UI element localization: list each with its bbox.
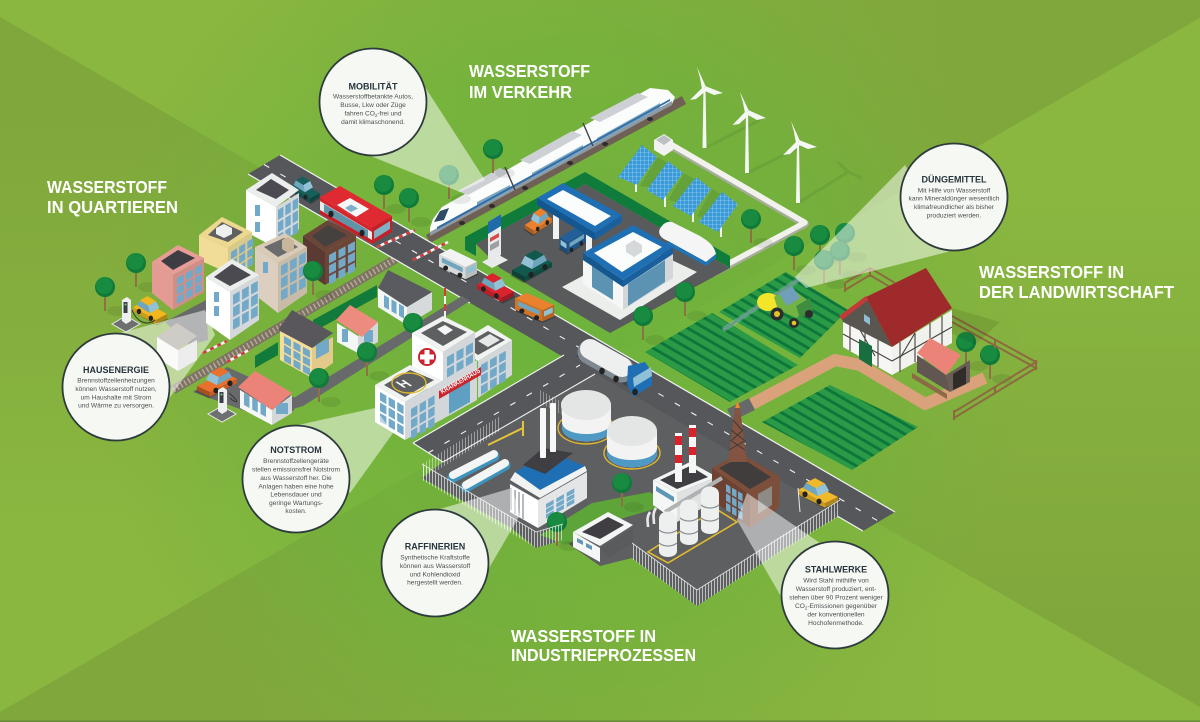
callout: Notstrom: stellen emissionsfrei Notstrom xyxy=(252,466,340,474)
gas station: hedge and pad xyxy=(465,172,730,333)
heading: Wasserstoff in Quartieren: WASSERSTOFF xyxy=(47,177,167,197)
solar panels xyxy=(618,145,738,237)
callout: Hausenergie: und Wärme zu versorgen. xyxy=(78,402,154,410)
callout: Notstrom: geringe Wartungs- xyxy=(269,500,323,507)
callout: Hausenergie: Brennstoffzellenheizungen xyxy=(77,378,155,384)
trees xyxy=(95,139,1012,384)
callout: Stahlwerke: 2 xyxy=(805,605,808,610)
trees at refinery xyxy=(547,473,644,551)
wind turbines xyxy=(690,67,862,203)
callout: Hausenergie: HAUSENERGIE xyxy=(83,365,149,375)
half-timbered farmhouse xyxy=(839,268,952,375)
callout: Raffinerien xyxy=(382,510,488,616)
fields xyxy=(645,272,918,470)
callout: Notstrom: Brennstoffzellengeräte xyxy=(263,458,329,465)
callout: Raffinerien: RAFFINERIEN xyxy=(405,542,465,552)
garage xyxy=(573,512,633,562)
helipad wing: H xyxy=(393,379,417,390)
gas cylinders xyxy=(453,454,505,487)
silos xyxy=(648,486,737,563)
callout: Notstrom: Anlagen haben eine hohe xyxy=(258,484,334,490)
callout: Raffinerien: und Kohlendioxid xyxy=(410,572,461,578)
taxi fence post xyxy=(798,488,800,512)
callout: Mobilität xyxy=(320,48,426,156)
illustrated isometric landscape xyxy=(95,67,1036,606)
factory ground xyxy=(413,355,840,606)
callout: Stahlwerke: Wasserstoff produziert, ent- xyxy=(796,586,876,593)
building: white front xyxy=(206,259,259,340)
heading: Wasserstoff in der Landwirtschaft xyxy=(979,262,1174,302)
callout: Düngemittel: produziert werden. xyxy=(927,212,981,220)
light beams from the callouts xyxy=(120,87,955,600)
storage tanks xyxy=(558,390,660,469)
callout: Stahlwerke xyxy=(782,542,888,648)
callout: Hausenergie xyxy=(62,334,170,440)
trees near houses xyxy=(309,313,435,407)
callout: Stahlwerke: Wird Stahl mithilfe von xyxy=(803,578,869,584)
heading: Wasserstoff in der Landwirtschaft: DER LANDWIRTSCHAFT xyxy=(979,282,1174,302)
heading: Wasserstoff in Quartieren xyxy=(47,177,178,217)
callout: Stahlwerke: -Emissionen gegenüber xyxy=(807,603,878,610)
callout: Mobilität: Busse, Lkw oder Züge xyxy=(340,102,406,109)
perimeter fence xyxy=(422,464,840,606)
railway track under the train xyxy=(173,100,684,390)
callout: Stahlwerke: stehen über 90 Prozent weniger xyxy=(789,594,884,602)
canopy xyxy=(537,183,622,257)
heading: Wasserstoff in Industrieprozessen xyxy=(511,626,696,665)
building: beige xyxy=(255,233,307,313)
heading: Wasserstoff in Industrieprozessen: WASSERSTOFF IN xyxy=(511,626,656,646)
steel works xyxy=(665,401,780,528)
hydrogen pipeline xyxy=(654,134,805,273)
farm path xyxy=(730,360,985,415)
industrial complex xyxy=(422,390,840,606)
callout: Stahlwerke: Hochofenmethode. xyxy=(808,620,864,627)
farm xyxy=(839,268,1036,420)
building: brown xyxy=(303,220,356,285)
tank and shop xyxy=(562,222,716,320)
charging station with yellow car xyxy=(112,296,169,332)
residential lanes xyxy=(165,296,470,420)
callout: Notstrom: Lebensdauer und xyxy=(270,492,322,498)
callout: Notstrom xyxy=(242,426,350,532)
heading: Wasserstoff in Industrieprozessen: INDUSTRIEPROZESSEN xyxy=(511,645,696,665)
callout: Raffinerien: hergestellt werden. xyxy=(407,580,463,586)
tower xyxy=(412,288,475,398)
house: yellow tall xyxy=(278,310,333,378)
heading: Wasserstoff im Verkehr: WASSERSTOFF xyxy=(469,61,590,81)
callout: Mobilität: 2 xyxy=(375,113,378,118)
building: yellow xyxy=(199,217,253,280)
right wing xyxy=(455,325,512,398)
callout: Hausenergie: können Wasserstoff nutzen, xyxy=(75,386,157,393)
callout: Mobilität: -frei und xyxy=(377,110,402,118)
callout: Notstrom: aus Wasserstoff her. Die xyxy=(260,475,332,482)
tractor with sprayer xyxy=(723,278,813,330)
building with red-white chimneys xyxy=(653,425,717,522)
helipad wing xyxy=(375,365,442,440)
callout: Mobilität: MOBILITÄT xyxy=(348,82,398,92)
refinery building xyxy=(510,403,587,528)
hospital xyxy=(375,288,512,440)
tree between buildings xyxy=(303,261,335,300)
house: grey rear xyxy=(157,323,197,371)
cars at the station and on the road xyxy=(290,176,840,510)
callout: Düngemittel: DÜNGEMITTEL xyxy=(922,174,987,184)
house: small pink xyxy=(336,305,378,353)
house: lower pink xyxy=(238,371,292,425)
callout: Notstrom: NOTSTROM xyxy=(270,445,322,455)
fence xyxy=(845,268,1036,420)
houses xyxy=(157,270,432,425)
charging station with orange car xyxy=(195,367,237,422)
sign: Krankenhaus xyxy=(439,367,482,399)
heading: Wasserstoff im Verkehr xyxy=(469,61,590,102)
callout: Raffinerien: können aus Wasserstoff xyxy=(400,563,470,570)
heading: Wasserstoff in Quartieren: IN QUARTIEREN xyxy=(47,197,178,217)
callout: Stahlwerke: CO xyxy=(795,603,805,610)
crossing barriers xyxy=(203,230,448,362)
entrance wing xyxy=(405,360,477,440)
price sign xyxy=(482,214,508,268)
callout: Düngemittel: Mit Hilfe von Wasserstoff xyxy=(918,188,990,194)
building: white rear xyxy=(246,173,299,248)
heading: Wasserstoff in der Landwirtschaft: WASSERSTOFF IN xyxy=(979,262,1124,282)
callout: Raffinerien: Synthetische Kraftstoffe xyxy=(400,554,470,562)
callout: Stahlwerke: der konventionellen xyxy=(807,612,865,618)
callout: Stahlwerke: STAHLWERKE xyxy=(805,564,867,574)
sign: Krankenhaus: KRANKENHAUS xyxy=(440,367,482,396)
road barrier xyxy=(488,421,523,445)
truck xyxy=(576,344,652,397)
building: pink xyxy=(152,245,204,310)
callout: Mobilität: damit klimaschonend. xyxy=(341,119,405,126)
heading: Wasserstoff im Verkehr: IM VERKEHR xyxy=(469,82,572,102)
apartment buildings xyxy=(152,173,356,340)
callout: Notstrom: kosten. xyxy=(285,508,307,515)
callout: Mobilität: fahren CO xyxy=(344,110,375,118)
small barn xyxy=(912,338,970,399)
train xyxy=(430,88,675,236)
hedges xyxy=(255,285,377,368)
callout: Mobilität: Wasserstoffbetankte Autos, xyxy=(333,94,413,100)
callout: Düngemittel: kann Mineraldünger wesentlich xyxy=(909,196,1000,202)
callout: Düngemittel: klimafreundlicher als bisher xyxy=(914,204,995,211)
bus xyxy=(320,186,392,244)
callout: Hausenergie: um Haushalte mit Strom xyxy=(81,394,152,402)
main road xyxy=(248,155,895,531)
house: dark roof xyxy=(378,270,432,325)
callout: Düngemittel xyxy=(900,144,1008,250)
